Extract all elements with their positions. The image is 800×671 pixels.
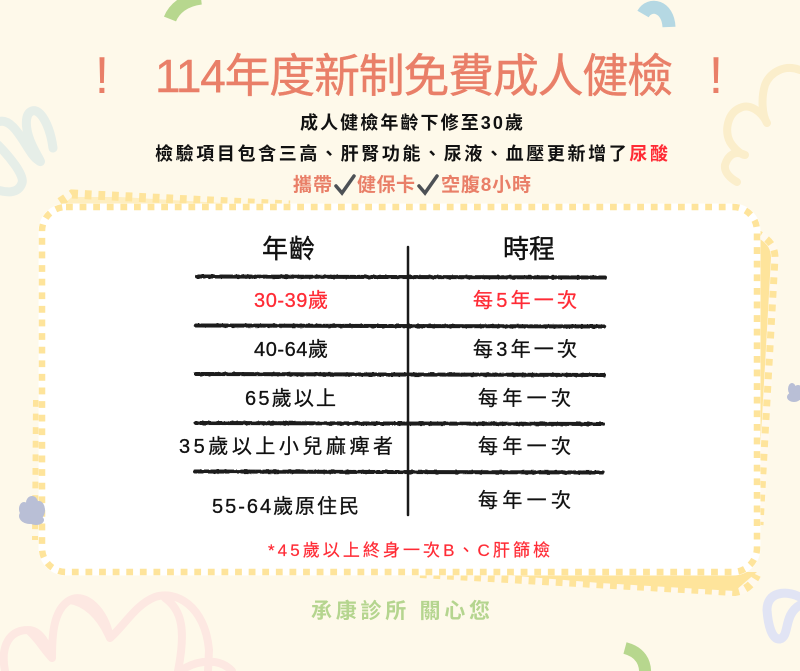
- row: 40-64: 40-64歲: [254, 338, 328, 361]
- decoration: purple flower right: [787, 383, 800, 402]
- title: !: [95, 47, 109, 105]
- row: polio: [179, 435, 571, 458]
- row: 30-39: 30-39歲: [254, 289, 328, 312]
- row: indigenous: [212, 489, 571, 518]
- title: 114年度新制免費成人健檢: [155, 50, 673, 102]
- panel: white table card: [42, 207, 757, 572]
- footer: clinic message: 承康診所 關心您: [311, 599, 490, 623]
- text: age lowered: 成人健檢年齡下修至30歲: [300, 112, 523, 133]
- table: [179, 234, 605, 518]
- decoration: pink cloud squiggle: [4, 595, 232, 671]
- footnote: *45歲以上終身一次B、C肝篩檢: [268, 541, 550, 560]
- row: 30-39: [254, 289, 577, 312]
- row: 65+: [245, 387, 571, 410]
- text: what to bring: 健保卡: [357, 174, 415, 196]
- title: !: [709, 47, 723, 105]
- table rules: [195, 247, 605, 515]
- text: what to bring: [293, 173, 531, 196]
- panel: yellow offset backing: [35, 194, 775, 592]
- table header: [262, 234, 555, 264]
- decoration: yellow squiggle right: [725, 68, 800, 182]
- row: polio: 每年一次: [478, 435, 571, 458]
- text: what to bring: 空腹8小時: [441, 173, 531, 196]
- table header: 時程: [503, 234, 555, 264]
- row: 65+: 每年一次: [478, 387, 571, 410]
- decoration: grey-blue squiggle left: [0, 111, 53, 192]
- icon: check mark: [336, 176, 354, 193]
- decoration: blue arch top: [643, 7, 669, 27]
- text: test items: 檢驗項目包含三高、肝腎功能、尿液、血壓更新增了尿酸: [155, 143, 668, 164]
- row: polio: 35歲以上小兒麻痺者: [179, 435, 393, 458]
- row: indigenous: 每年一次: [478, 489, 571, 512]
- text: what to bring: 攜帶: [293, 174, 332, 196]
- icon: check mark: [419, 176, 437, 193]
- decoration: green arc bottom right: [625, 648, 645, 671]
- decoration: green arc top: [170, 0, 201, 19]
- table header: 年齡: [262, 234, 315, 264]
- row: 65+: 65歲以上: [245, 387, 336, 410]
- decoration: lavender squiggle right: [767, 593, 800, 639]
- row: 40-64: 每3年一次: [473, 338, 577, 361]
- row: 30-39: 每5年一次: [473, 289, 577, 312]
- row: indigenous: 55-64歲原住民: [212, 495, 359, 518]
- row: 40-64: [254, 338, 577, 361]
- decoration: purple flower left: [19, 496, 45, 525]
